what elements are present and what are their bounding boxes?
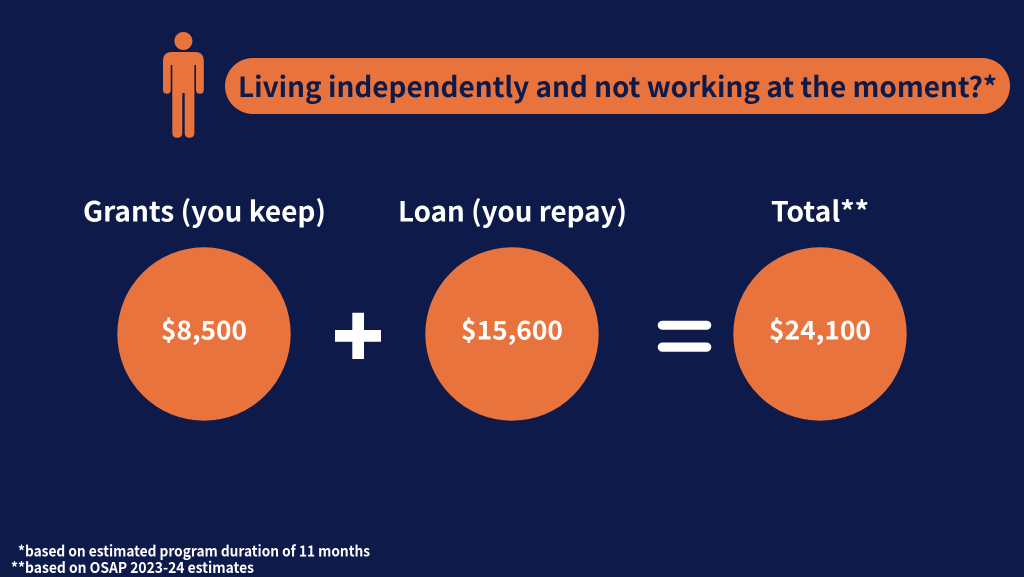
circle: total amount: [733, 247, 907, 421]
circle: total amount: $24,100: [769, 310, 871, 347]
icon: equals: [658, 321, 711, 352]
icon: plus: [335, 313, 381, 359]
heading: loan: Loan (you repay): [398, 190, 627, 230]
icon: person: [163, 32, 204, 138]
heading: total: Total**: [771, 190, 869, 230]
circle: loan amount: [425, 247, 599, 421]
circle: grants amount: [117, 247, 291, 421]
circle: loan amount: $15,600: [461, 310, 563, 347]
heading: grants: Grants (you keep): [83, 190, 326, 230]
footnote: duration: *based on estimated program duration of 11 months: [18, 540, 370, 562]
question banner: [225, 58, 1010, 114]
circle: grants amount: $8,500: [161, 310, 247, 347]
question banner: Living independently and not working at the moment?*: [238, 66, 997, 106]
